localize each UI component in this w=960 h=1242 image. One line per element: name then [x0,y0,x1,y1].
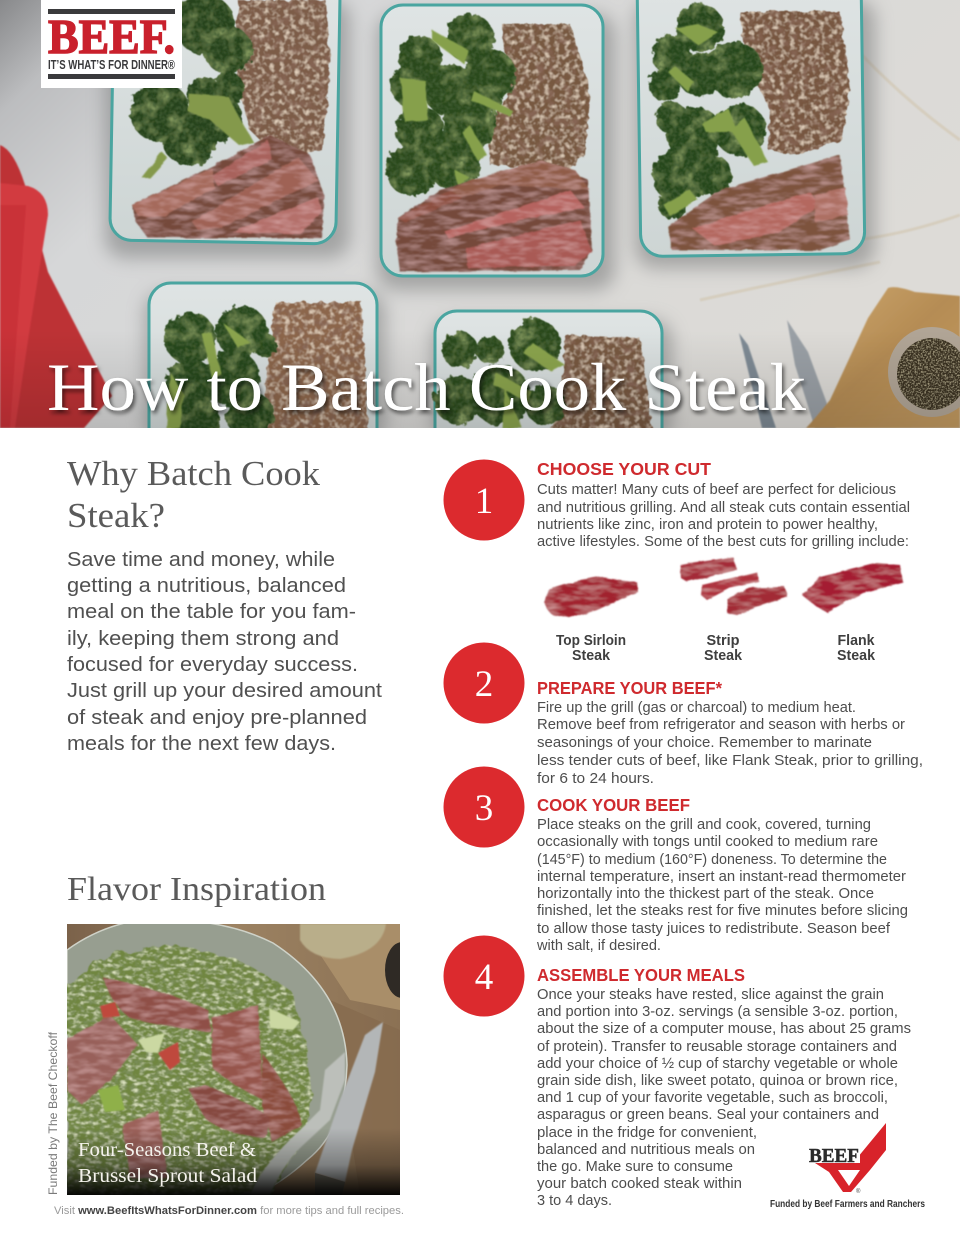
step 3 text: to allow those tasty juices to redistribute. Season beef [537,921,891,937]
heading: why batch cook steak: Why Batch Cook [67,454,321,493]
step 2 text: less tender cuts of beef, like Flank Steak, prior to grilling, [537,753,923,769]
step 3 text: internal temperature, insert an instant-read thermometer [537,869,906,885]
heading: why batch cook steak [67,454,321,535]
intro paragraph: of steak and enjoy pre-planned [67,706,367,729]
number badge 1 [444,460,524,540]
steak cut labels: Top Sirloin [556,633,626,649]
flank steak image [802,563,903,612]
step 3 text: occasionally with tongs until cooked to medium rare [537,834,878,850]
step 3 text: Place steaks on the grill and cook, covered, turning [537,817,871,833]
step 1 heading: CHOOSE YOUR CUT [537,459,711,479]
step 4 text: grain side dish, like sweet potato, quinoa or brown rice, [537,1073,898,1089]
salad photo [67,919,419,1197]
step 4 text: balanced and nutritious meals on [537,1142,755,1158]
step 4 text [537,987,911,1209]
step 3 text: (145°F) to medium (160°F) doneness. To determine the [537,852,887,868]
number badge 2 [444,642,524,724]
salad caption [78,1139,257,1187]
steak cut labels: Strip [706,633,740,649]
BEEF It's What's For Dinner logo: IT’S WHAT’S FOR DINNER® [48,57,175,72]
intro paragraph: focused for everyday success. [67,653,358,676]
intro paragraph: ily, keeping them strong and [67,627,339,650]
container 2 [381,5,603,276]
step 3 text: finished, let the steaks rest for five minutes before slicing [537,903,908,919]
number badge 2: 2 [475,664,493,705]
website note: Visit www.BeefItsWhatsForDinner.com for more tips and full recipes. [54,1205,404,1217]
heading: flavor inspiration: Flavor Inspiration [67,871,326,908]
heading: why batch cook steak: Steak? [67,496,165,535]
step 3 text [536,817,908,954]
container 4 [148,282,378,428]
container 1 [110,0,340,244]
step 1 [444,459,910,664]
pepper bowl [385,942,400,998]
step 2 text: Remove beef from refrigerator and season with herbs or [537,717,905,733]
metal tongs [739,320,836,428]
BEEF checkmark logo: ® [856,1188,861,1195]
container 5 [431,310,664,428]
step 4 text: add your choice of ½ cup of starchy vegetable or whole [537,1056,898,1072]
intro paragraph: Just grill up your desired amount [67,679,382,702]
number badge 1: 1 [475,481,493,522]
hero photo: meal prep containers [0,0,960,428]
intro paragraph: Save time and money, while [67,548,335,571]
bowl of ground pepper [888,327,960,417]
number badge 4: 4 [475,957,493,998]
container shadows [105,0,875,442]
step 1 text: nutrients like zinc, iron and protein to power healthy, [537,517,878,533]
strip steak image [680,557,787,615]
step 2 [444,642,923,787]
steak cut labels: Flank [838,633,875,649]
step 3 text: with salt, if desired. [536,938,661,954]
number badge 3: 3 [475,788,493,829]
step 1 text: active lifestyles. Some of the best cuts for grilling include: [537,534,909,550]
container 3 [637,0,865,257]
step 2 text [537,700,923,787]
step 2 text: Fire up the grill (gas or charcoal) to medium heat. [537,700,856,716]
steak cut labels: Steak [704,648,743,664]
step 4 heading: ASSEMBLE YOUR MEALS [537,965,745,985]
BEEF It's What's For Dinner logo: BEEF. [48,9,175,64]
step 1 text: Cuts matter! Many cuts of beef are perfect for delicious [537,482,896,498]
step 4 [444,936,911,1209]
number badge 4 [444,936,524,1016]
BEEF checkmark logo [808,1123,886,1195]
top sirloin steak image [545,577,638,618]
step 4 text: your batch cooked steak within [537,1176,742,1192]
intro paragraph: getting a nutritious, balanced [67,574,346,597]
step 4 text: and 1 cup of your favorite vegetable, such as broccoli, [537,1090,888,1106]
red container lids [0,145,112,428]
funded by the beef checkoff vertical note: Funded by The Beef Checkoff [46,1031,60,1195]
step 1 text [537,482,910,550]
fork [250,1052,345,1195]
step 3 heading: COOK YOUR BEEF [537,795,690,815]
step 2 text: seasonings of your choice. Remember to marinate [537,735,872,751]
number badge 3 [444,766,524,848]
glass jar [300,924,386,959]
step 4 text: of protein). Transfer to reusable storage containers and [537,1039,897,1055]
steak cut labels: Steak [837,648,876,664]
intro paragraph: meal on the table for you fam- [67,600,356,623]
intro paragraph [67,548,382,755]
step 2 text: for 6 to 24 hours. [537,771,654,787]
step 4 text: the go. Make sure to consume [537,1159,733,1175]
apple pieces [98,1002,300,1112]
plate [67,919,347,1197]
steak slices [67,978,302,1178]
salad caption: Brussel Sprout Salad [78,1165,257,1187]
steak cut labels [556,633,876,664]
BEEF checkmark logo: BEEF [809,1145,859,1167]
knife [315,1022,383,1182]
step 2 heading: PREPARE YOUR BEEF* [537,678,722,698]
BEEF It's What's For Dinner logo [41,0,182,88]
wooden cutting board [806,287,960,428]
funded by beef farmers and ranchers: Funded by Beef Farmers and Ranchers [770,1198,925,1210]
step 4 text: and portion into 3-oz. servings (a sensible 3-oz. portion, [537,1004,898,1020]
step 3 [444,766,908,954]
step 4 text: asparagus or green beans. Seal your containers and [537,1107,879,1123]
title: How to Batch Cook Steak [47,349,806,425]
step 4 text: place in the fridge for convenient, [537,1125,757,1141]
shredded salad greens [67,945,312,1195]
step 4 text: 3 to 4 days. [537,1193,612,1209]
step 4 text: about the size of a computer mouse, has about 25 grams [537,1021,911,1037]
step 4 text: Once your steaks have rested, slice against the grain [537,987,884,1003]
intro paragraph: meals for the next few days. [67,732,336,755]
step 1 text: and nutritious grilling. And all steak cuts contain essential [537,500,910,516]
step 3 text: horizontally into the thickest part of the steak. Once [537,886,874,902]
steak cut labels: Steak [572,648,611,664]
salad caption: Four-Seasons Beef & [78,1139,256,1161]
